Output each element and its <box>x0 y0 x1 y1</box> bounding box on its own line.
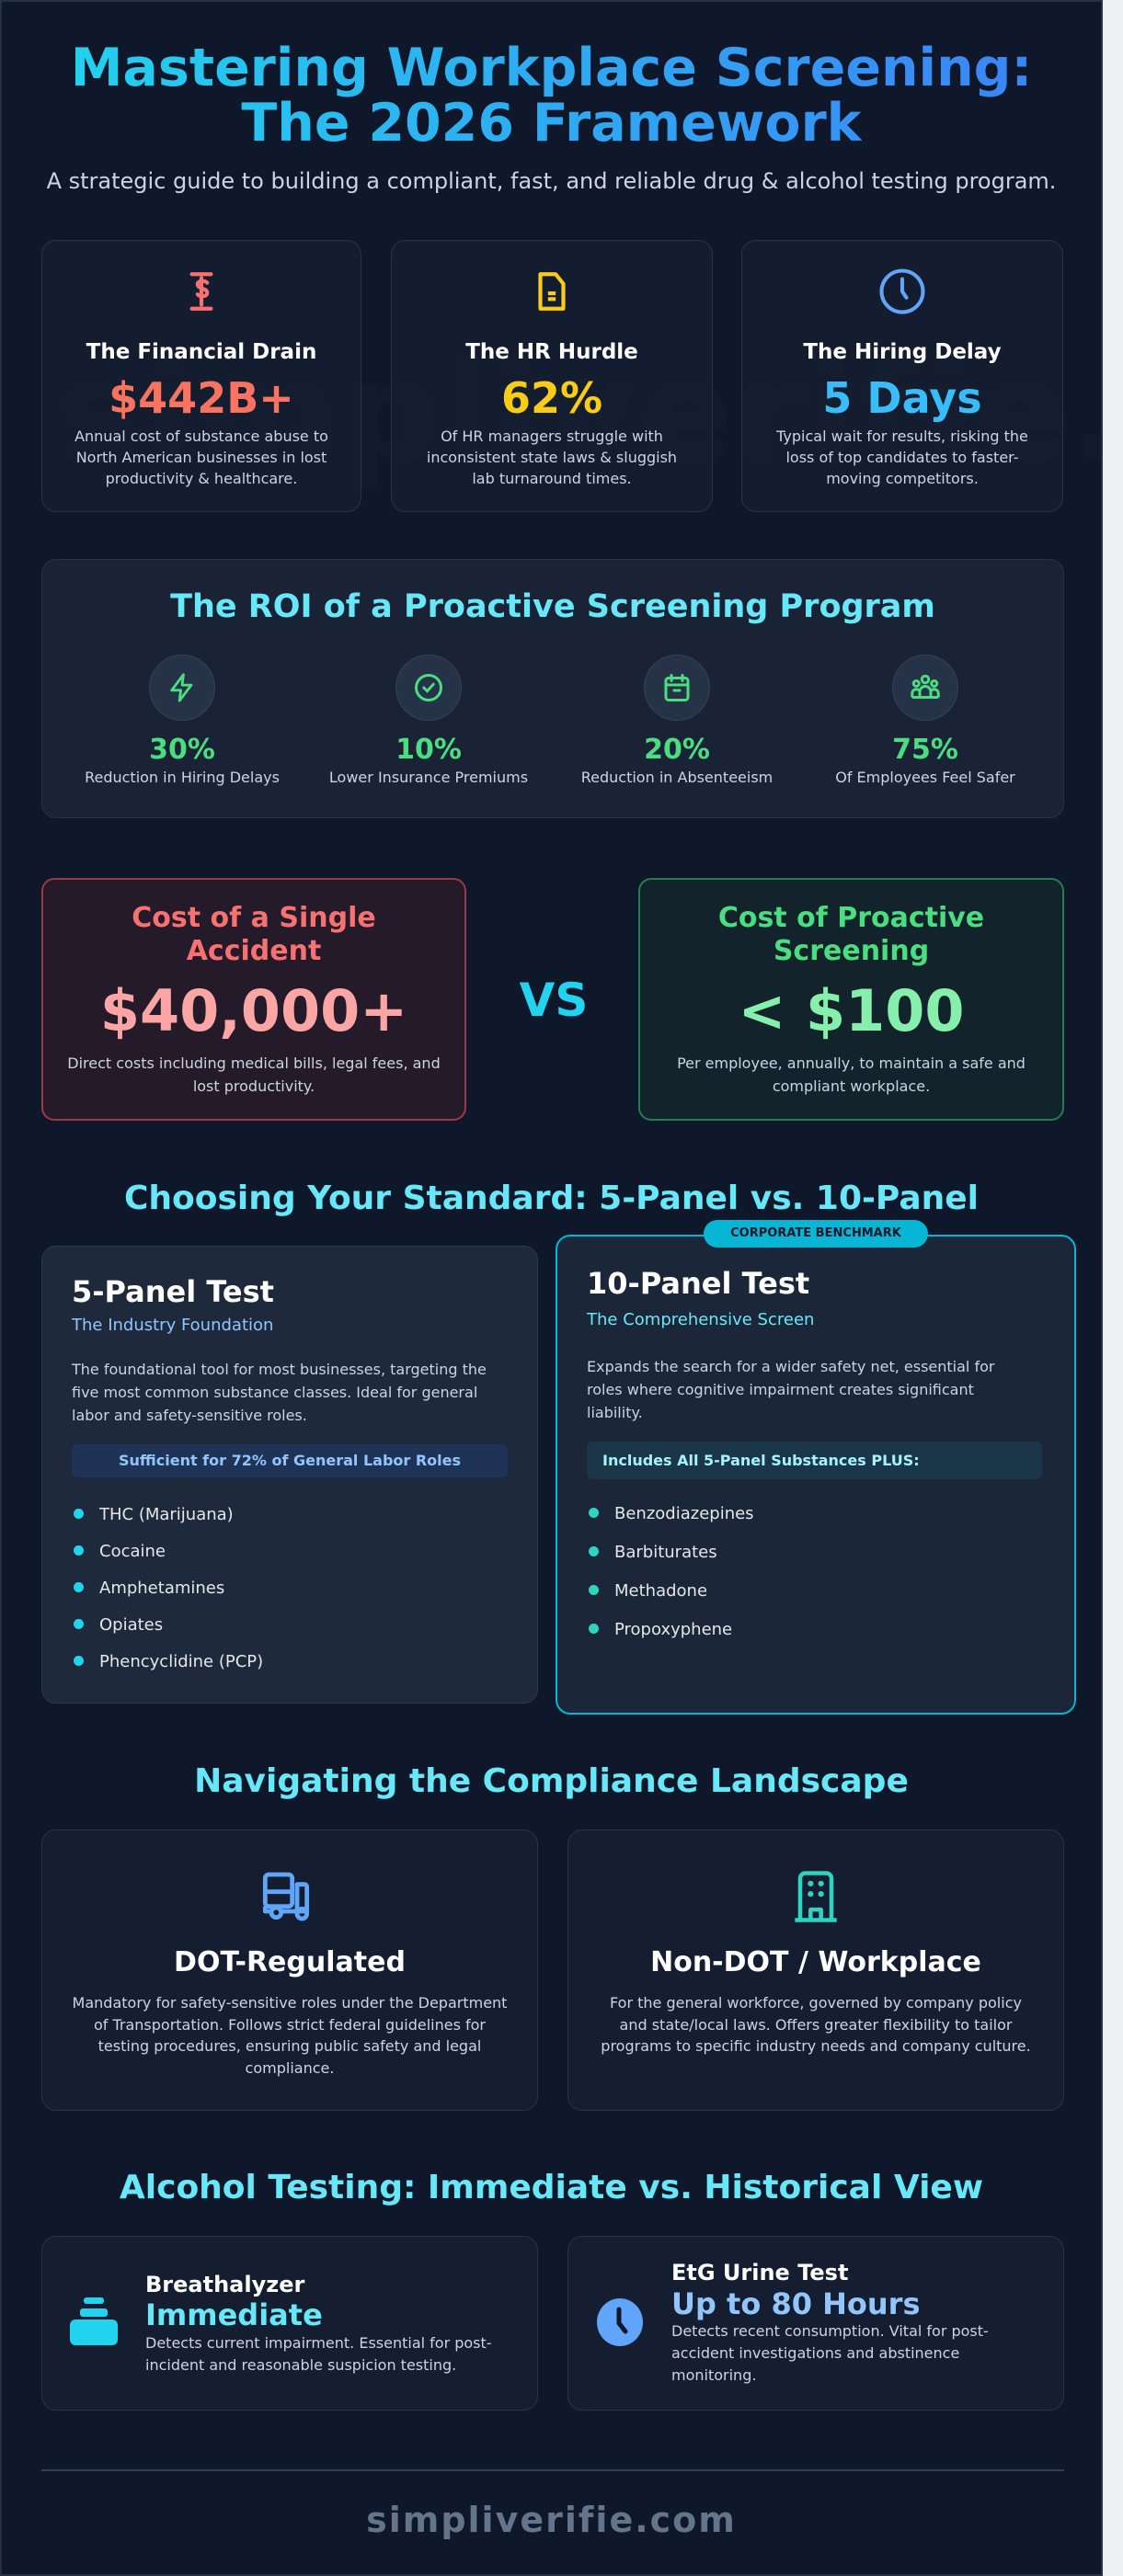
DOT description: Mandatory for safety-sensitive roles under the Department of Transportation. Follows strict federal guidelines for testing procedures, ensuring public safety and legal compliance. <box>73 1994 507 2076</box>
ROI item: safer: 75% <box>892 734 958 766</box>
ROI item: insurance <box>329 655 528 786</box>
breathalyzer title: Breathalyzer <box>145 2272 304 2297</box>
stat card: hiring delay <box>741 240 1063 512</box>
10-panel pill: Includes All 5-Panel Substances PLUS: <box>602 1452 920 1469</box>
ROI item: safer: Of Employees Feel Safer <box>835 769 1015 786</box>
panel: EtG urine test <box>567 2236 1064 2411</box>
10-panel description: Expands the search for a wider safety net, essential for roles where cognitive impairment creates significant liability. <box>587 1358 994 1421</box>
DOT title: DOT-Regulated <box>174 1946 406 1978</box>
screening heading: Screening <box>773 935 929 967</box>
screening heading <box>718 902 984 967</box>
panel: cost of accident <box>41 878 466 1121</box>
breathalyzer description: Detects current impairment. Essential for post-incident and reasonable suspicion testing. <box>145 2334 492 2374</box>
accident heading: Cost of a Single <box>132 902 376 934</box>
ROI item: safer <box>835 655 1015 786</box>
description: Typical wait for results, risking the loss of top candidates to faster-moving competitors. <box>776 427 1028 487</box>
icon: document <box>538 272 566 311</box>
breathalyzer value: Immediate <box>145 2297 323 2332</box>
ROI item: hiring delays: Reduction in Hiring Delays <box>85 769 280 786</box>
heading: alcohol testing: Alcohol Testing: Immediate vs. Historical View <box>120 2169 983 2206</box>
panel: breathalyzer <box>41 2236 538 2411</box>
title: Mastering Workplace Screening: <box>71 38 1032 98</box>
number: 5 Days <box>822 373 982 423</box>
ROI item: hiring delays: 30% <box>149 734 215 766</box>
description: Annual cost of substance abuse to North American businesses in lost productivity & healthcare. <box>74 427 328 487</box>
10-panel list: Benzodiazepines <box>614 1504 754 1523</box>
5-panel list: Cocaine <box>99 1542 166 1561</box>
ROI item: absenteeism: 20% <box>644 734 710 766</box>
10-panel title: 10-Panel Test <box>587 1266 809 1301</box>
ROI item: absenteeism: Reduction in Absenteeism <box>581 769 773 786</box>
ROI item: insurance: Lower Insurance Premiums <box>329 769 528 786</box>
heading: The Financial Drain <box>86 340 316 364</box>
ROI item: insurance: 10% <box>395 734 462 766</box>
icon: truck <box>263 1872 309 1921</box>
5-panel pill <box>72 1444 508 1477</box>
10-panel pill <box>587 1442 1042 1479</box>
ROI item: hiring delays <box>85 655 280 786</box>
screening number: < $100 <box>738 977 965 1044</box>
10-panel list: Methadone <box>614 1581 707 1601</box>
heading: compliance: Navigating the Compliance Landscape <box>194 1762 909 1800</box>
5-panel title: 5-Panel Test <box>72 1274 274 1309</box>
5-panel list: Opiates <box>99 1615 163 1635</box>
ROI heading: The ROI of a Proactive Screening Program <box>170 588 935 625</box>
10-panel list <box>589 1504 754 1639</box>
10-panel subtitle: The Comprehensive Screen <box>587 1310 814 1329</box>
badge: corporate benchmark: CORPORATE BENCHMARK <box>730 1226 901 1240</box>
5-panel list <box>74 1505 263 1671</box>
non-DOT title: Non-DOT / Workplace <box>650 1946 981 1978</box>
number: $442B+ <box>109 373 294 423</box>
panel: 10-panel test <box>556 1235 1076 1715</box>
subtitle: A strategic guide to building a compliant, fast, and reliable drug & alcohol testing program. <box>47 168 1056 194</box>
5-panel list: Amphetamines <box>99 1579 224 1598</box>
title <box>39 40 1064 151</box>
icon: dollar <box>189 272 213 311</box>
panel: non-DOT <box>567 1829 1064 2111</box>
heading: The Hiring Delay <box>803 340 1002 364</box>
EtG title: EtG Urine Test <box>671 2260 848 2285</box>
screening description: Per employee, annually, to maintain a safe and compliant workplace. <box>677 1054 1026 1095</box>
10-panel list: Propoxyphene <box>614 1620 732 1639</box>
5-panel list: Phencyclidine (PCP) <box>99 1652 263 1671</box>
screening heading: Cost of Proactive <box>718 902 984 934</box>
footer brand: simpliverifie.com <box>366 2500 737 2540</box>
accident description: Direct costs including medical bills, legal fees, and lost productivity. <box>67 1054 441 1095</box>
description: Of HR managers struggle with inconsistent state laws & sluggish lab turnaround times. <box>427 427 677 487</box>
icon: clock <box>879 268 925 314</box>
5-panel list: THC (Marijuana) <box>99 1505 234 1524</box>
accident number: $40,000+ <box>100 977 407 1044</box>
10-panel list: Barbiturates <box>614 1543 717 1562</box>
ROI item: absenteeism <box>581 655 773 786</box>
icon: building <box>795 1871 837 1922</box>
panel: 5-panel test <box>41 1246 538 1704</box>
stat card: financial drain <box>41 240 361 512</box>
EtG description: Detects recent consumption. Vital for post-accident investigations and abstinence monitoring. <box>671 2322 989 2384</box>
non-DOT description: For the general workforce, governed by company policy and state/local laws. Offers greater flexibility to tailor programs to specific industry needs and company culture. <box>601 1994 1031 2055</box>
VS label: VS <box>520 974 588 1027</box>
EtG value: Up to 80 Hours <box>671 2286 920 2321</box>
title: The 2026 Framework <box>241 93 862 154</box>
panel: DOT-regulated <box>41 1829 538 2111</box>
accident heading <box>132 902 376 967</box>
icon: breathalyzer <box>70 2297 118 2345</box>
number: 62% <box>501 373 602 423</box>
heading: The HR Hurdle <box>465 340 638 364</box>
accident heading: Accident <box>187 935 321 967</box>
panel: cost of screening <box>638 878 1064 1121</box>
stat card: HR hurdle <box>391 240 713 512</box>
5-panel description: The foundational tool for most businesses, targeting the five most common substance classes. Ideal for general labor and safety-sensitive roles. <box>72 1361 487 1424</box>
icon: clock filled <box>597 2298 643 2346</box>
badge: corporate benchmark <box>704 1220 928 1248</box>
heading: choosing standard: Choosing Your Standard: 5-Panel vs. 10-Panel <box>124 1180 979 1217</box>
5-panel pill: Sufficient for 72% of General Labor Roles <box>119 1452 461 1469</box>
5-panel subtitle: The Industry Foundation <box>72 1316 273 1335</box>
panel: ROI <box>41 559 1064 818</box>
